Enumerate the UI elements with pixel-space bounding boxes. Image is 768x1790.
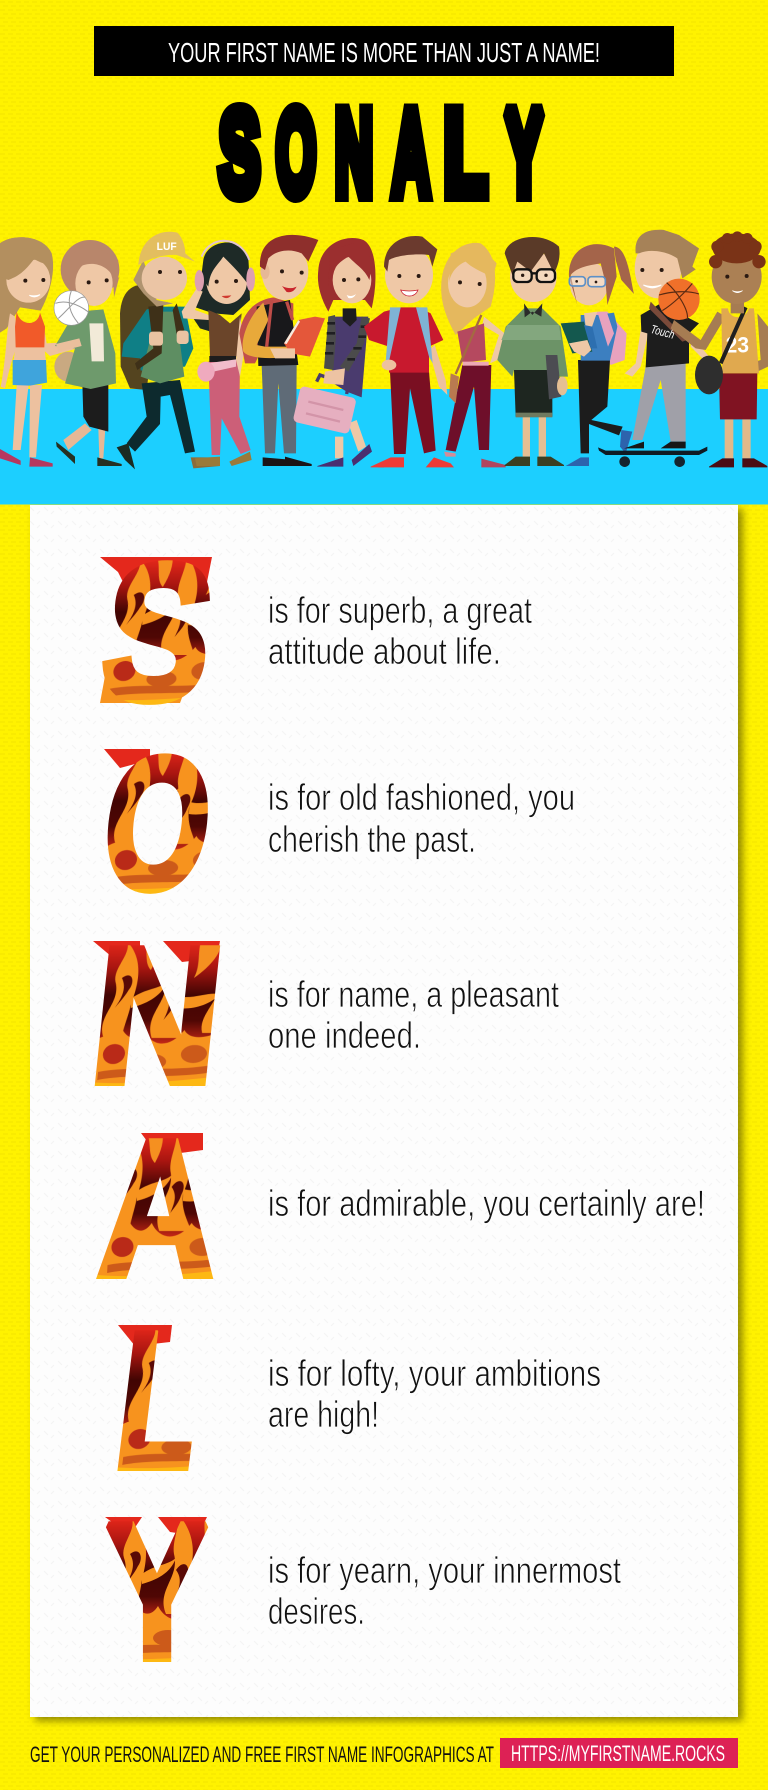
text: L line: are high! [268,1394,379,1435]
title: SONALY: O [276,86,316,220]
flame A: A [95,1100,222,1316]
letter L [107,1294,211,1509]
flame O: O [95,718,221,928]
curly hair [709,231,766,268]
person: backpacker with yellow cap [117,232,220,469]
letter S [92,526,224,741]
title: SONALY: L [444,86,487,220]
text: L line: is for lofty, your ambitions [268,1353,601,1394]
icon: volleyball [54,291,89,325]
text: N line: is for name, a pleasant [268,974,560,1015]
text: S line: attitude about life. [268,631,501,672]
text: Y [505,86,543,220]
person: girl in orange top [0,237,77,467]
person: skater with basketball: Touch [649,322,676,342]
title: SONALY: S [219,86,260,220]
person: boy with curly hair [658,231,768,467]
flame S: S [92,526,224,741]
footer text: GET YOUR PERSONALIZED AND FREE FIRST NAME INFOGRAPHICS AT [30,1742,494,1767]
person: boy with curly hair: 23 [726,333,749,358]
text: O line: cherish the past. [268,819,476,860]
text: Y line: desires. [268,1591,365,1632]
people group: right six [364,230,768,467]
text: S line: is for superb, a great [268,590,533,631]
text: N line: one indeed. [268,1015,421,1056]
person: girl with headphones [182,241,255,466]
person: skater with basketball [598,230,711,467]
text: S line [268,590,533,672]
person: blonde girl [441,243,507,467]
text: O line [268,777,575,860]
person: backpacker with yellow cap: LUF [157,241,177,253]
text: L line [268,1353,601,1435]
person: boy in red shirt [364,236,454,467]
letter O [95,718,221,928]
title: SONALY: N [335,86,373,220]
panel: name letters [30,505,738,1717]
people group: left six [0,232,384,469]
text: Y line: is for yearn, your innermost [268,1550,622,1591]
title: SONALY: A [392,86,430,220]
flame N: N [83,908,232,1124]
icon: skateboard [598,447,707,467]
person: boy with glasses [497,237,568,466]
icon: basketball [658,279,700,320]
blue floor band [0,389,768,504]
person: girl with volleyball [54,240,122,466]
letter Y [105,1483,208,1699]
letter N [83,908,232,1124]
text: O line: is for old fashioned, you [268,777,575,818]
flame Y: Y [106,1483,208,1699]
person: boy with book [239,235,325,466]
text: N line [268,974,560,1056]
person: girl with pink bag [293,238,384,467]
flame L: L [107,1294,211,1509]
person: ponytail girl with tablet [561,244,634,466]
letter A [95,1100,222,1316]
banner [94,26,674,76]
text: Y line [268,1550,622,1632]
title: SONALY [219,86,543,220]
